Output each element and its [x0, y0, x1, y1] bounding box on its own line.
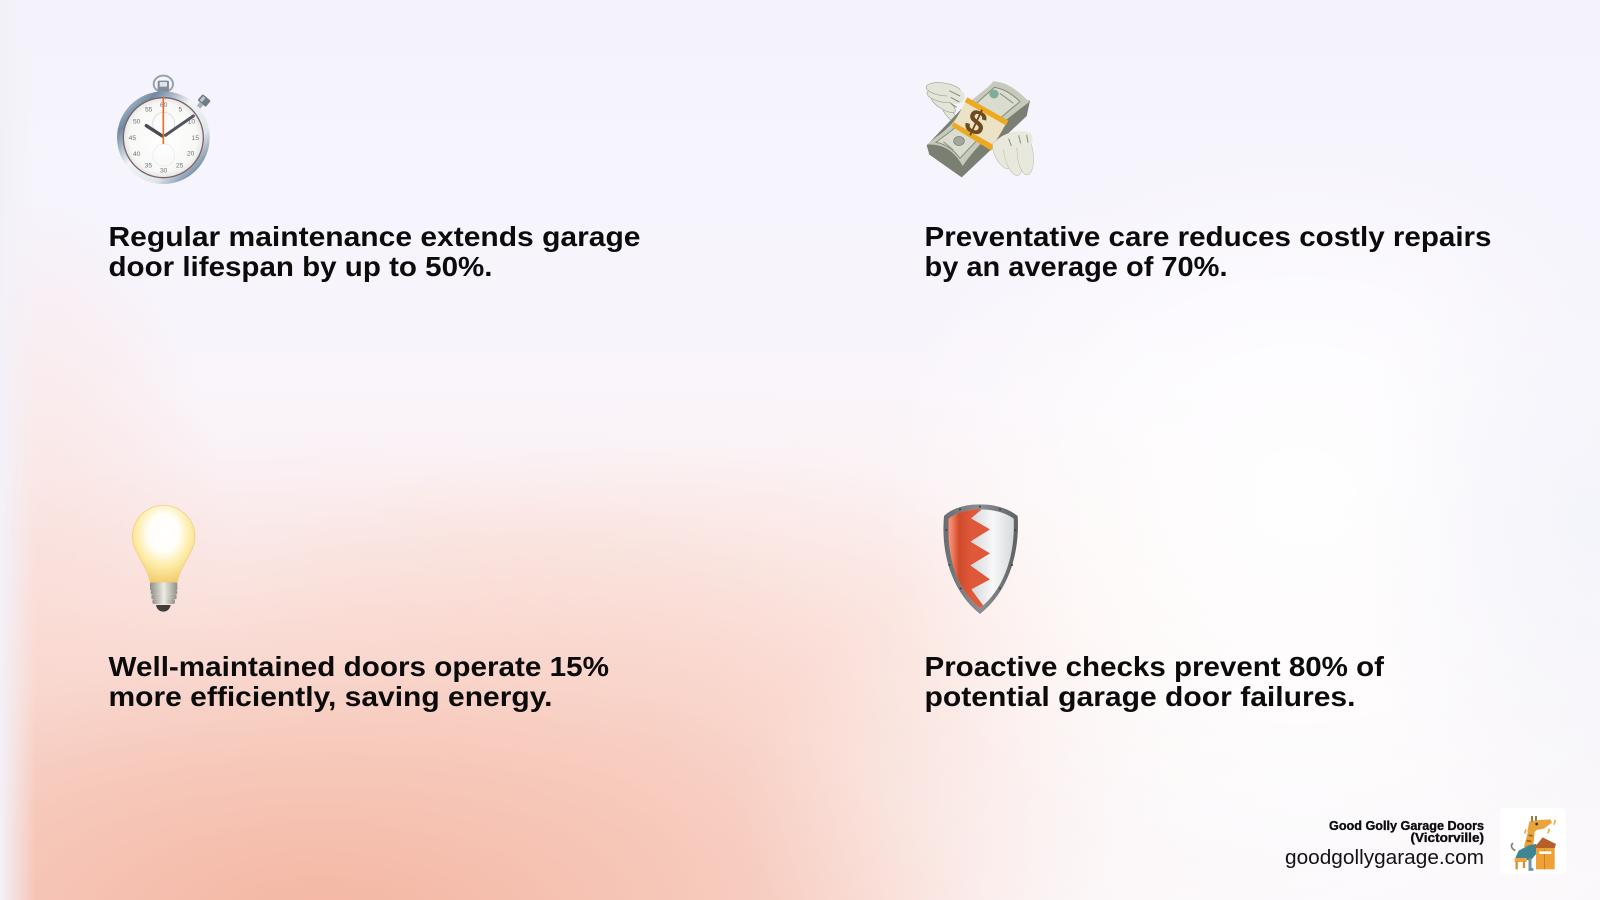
icon: light bulb — [132, 505, 196, 612]
text block: lifespan statistic — [108, 221, 640, 282]
icon: stopwatch: 5 — [178, 107, 182, 114]
text block: failure prevention statistic: Proactive checks prevent 80% of — [924, 651, 1385, 682]
text block: efficiency statistic — [108, 651, 609, 712]
footer: website: goodgollygarage.com — [1285, 847, 1484, 869]
icon: stopwatch: 35 — [145, 162, 152, 169]
text block: repair cost statistic: Preventative care reduces costly repairs — [924, 221, 1492, 252]
icon: shield — [943, 504, 1018, 614]
footer: business name: (Victorville) — [1410, 831, 1484, 845]
text block: efficiency statistic: Well-maintained doors operate 15% — [108, 651, 609, 682]
music notes — [1525, 820, 1555, 833]
text block: efficiency statistic: more efficiently, saving energy. — [108, 681, 552, 712]
left wing — [925, 81, 965, 125]
icon: stopwatch: 20 — [187, 151, 195, 158]
icon: stopwatch: 60 — [160, 102, 168, 109]
icon: stopwatch: 50 — [133, 119, 141, 126]
icon: stopwatch: 15 — [192, 135, 199, 142]
footer: business name — [1329, 819, 1484, 845]
text block: repair cost statistic — [924, 221, 1492, 282]
icon: stopwatch: 40 — [133, 151, 141, 158]
icon: stopwatch: 10 — [188, 118, 195, 125]
icon: stopwatch: 55 — [145, 107, 153, 114]
icon: stopwatch: 45 — [129, 135, 136, 142]
giraffe neck and head — [1524, 816, 1552, 849]
icon: stopwatch: 30 — [160, 167, 168, 174]
logo: giraffe and garage badge — [1501, 808, 1566, 872]
garage building — [1534, 837, 1556, 869]
giraffe body in teal jacket — [1511, 843, 1539, 869]
icon: stopwatch — [117, 74, 210, 184]
text block: lifespan statistic: Regular maintenance extends garage — [108, 221, 640, 252]
text block: repair cost statistic: by an average of 70%. — [924, 251, 1228, 282]
text block: failure prevention statistic: potential garage door failures. — [924, 681, 1356, 712]
paper band with dollar sign: $ — [959, 102, 993, 144]
text block: lifespan statistic: door lifespan by up to 50%. — [108, 251, 492, 282]
right wing — [989, 131, 1035, 178]
bills stack — [927, 81, 1030, 177]
icon: money with wings — [926, 81, 1034, 178]
icon: stopwatch: 25 — [176, 162, 184, 169]
footer: business name: Good Golly Garage Doors — [1329, 819, 1484, 833]
text block: failure prevention statistic — [924, 651, 1385, 712]
